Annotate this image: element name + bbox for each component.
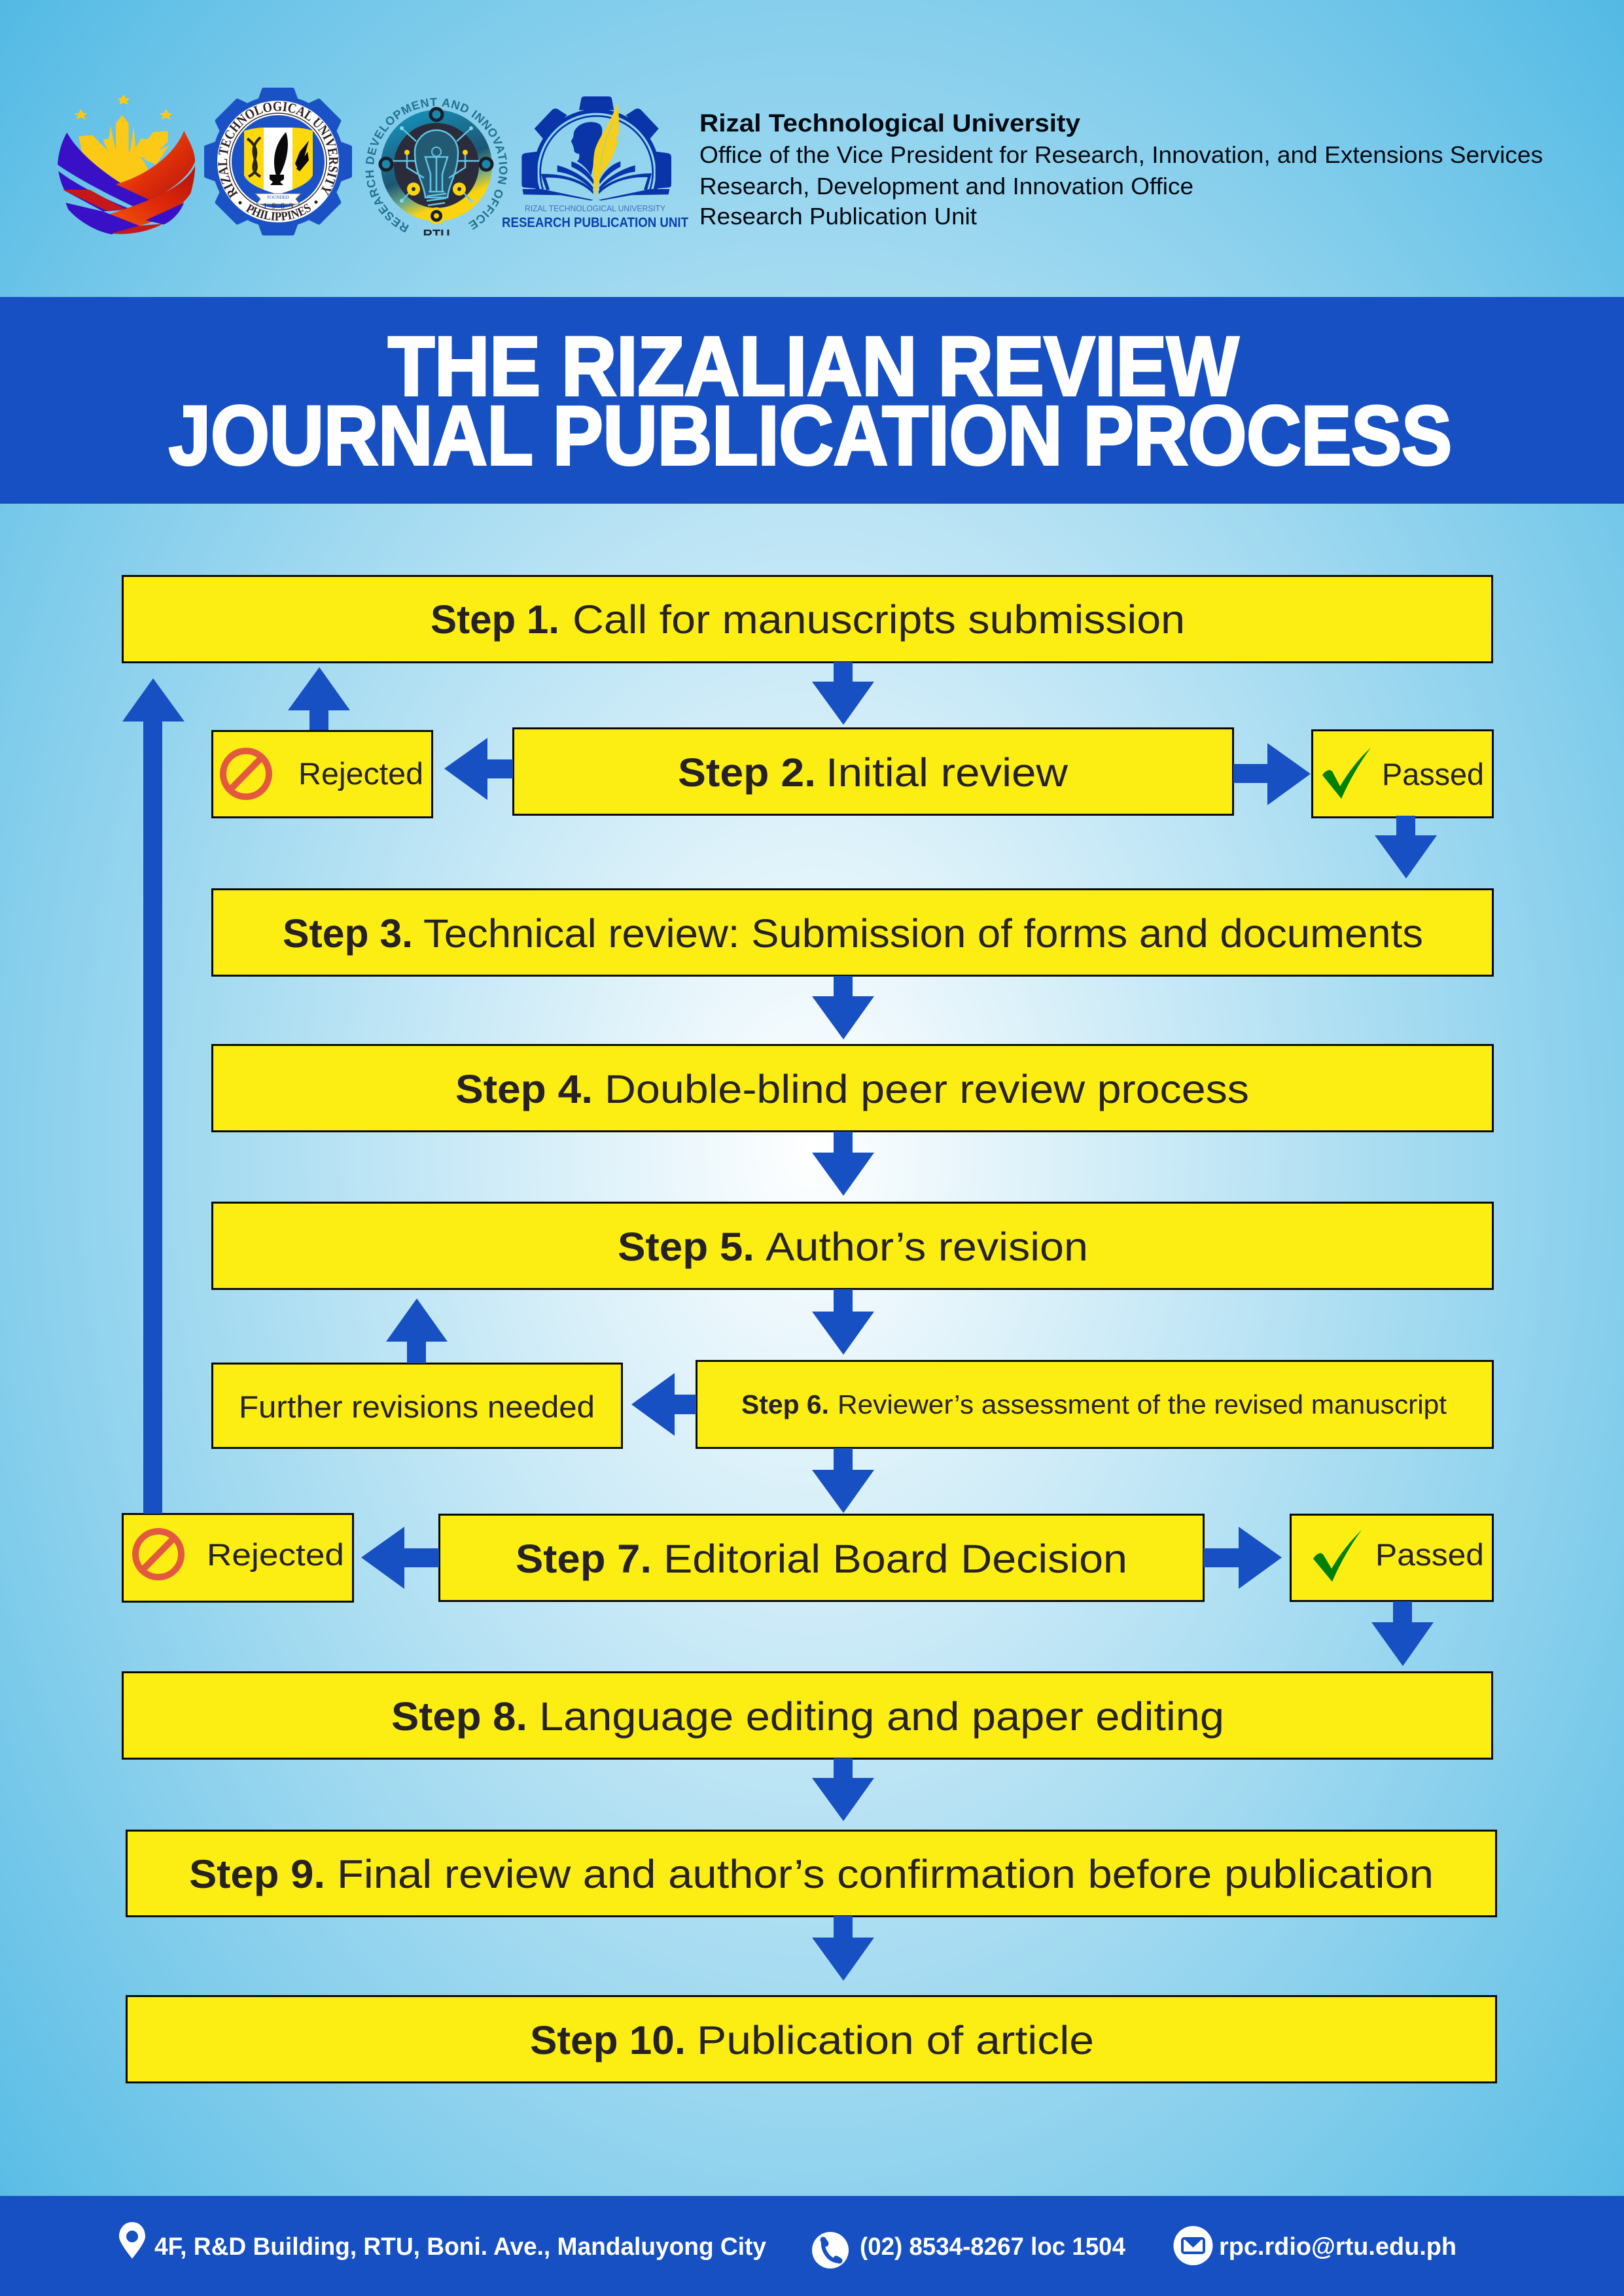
step 3 box: Technical review: Submission of forms and documents — [423, 911, 1423, 956]
step 4 box: Double-blind peer review process — [605, 1067, 1249, 1111]
step 9 box: Step 9. — [189, 1852, 325, 1896]
step 8 box: Language editing and paper editing — [539, 1694, 1224, 1739]
arrow: step 4 to step 5 — [812, 1132, 874, 1196]
arrow: step 7 to passed — [1203, 1527, 1282, 1589]
step 8 box — [123, 1672, 1492, 1758]
icon: location pin — [119, 2222, 145, 2259]
step 6 box — [696, 1361, 1493, 1448]
step 10 box: Step 10. — [530, 2018, 686, 2062]
arrow: passed to step 8 — [1371, 1601, 1434, 1666]
step 4 box: Step 4. — [455, 1067, 593, 1111]
step 7 box: Step 7. — [516, 1537, 652, 1581]
arrow: step 2 to rejected — [444, 738, 513, 800]
rejected box after step 2: Rejected — [298, 756, 423, 791]
phone text: (02) 8534-8267 loc 1504 — [860, 2233, 1125, 2261]
logo: Philippine sun ribbon emblem — [58, 94, 195, 234]
passed box after step 7 — [1290, 1515, 1493, 1601]
step 2 box: Initial review — [826, 750, 1068, 795]
arrow: step 6 to step 7 — [812, 1448, 874, 1513]
arrow: further revisions to step 5 — [386, 1298, 448, 1363]
panel: header — [58, 88, 1543, 235]
title text: JOURNAL PUBLICATION PROCESS — [169, 389, 1452, 483]
logo: Rizal Technological University seal: FOUNDED — [267, 195, 289, 200]
step 1 box: Step 1. — [431, 597, 559, 642]
step 5 box: Step 5. — [618, 1225, 754, 1269]
arrow: rejected at step 7 back to step 1 — [122, 678, 185, 1514]
logo caption: unit: RESEARCH PUBLICATION UNIT — [502, 215, 688, 230]
arrow: step 5 to step 6 — [812, 1289, 874, 1355]
title text: THE RIZALIAN REVIEW — [388, 320, 1239, 413]
step 6 box: Step 6. — [741, 1389, 829, 1419]
step 4 box — [212, 1045, 1493, 1132]
step 9 box: Final review and author’s confirmation before publication — [337, 1852, 1434, 1896]
icon: green check — [1322, 748, 1371, 799]
flowchart — [122, 576, 1496, 2083]
header text block: Research, Development and Innovation Office — [699, 173, 1193, 200]
step 5 box: Author’s revision — [766, 1225, 1088, 1269]
logo: Research Publication Unit — [502, 96, 688, 234]
header text block: Rizal Technological University — [699, 110, 1080, 137]
email text: rpc.rdio@rtu.edu.ph — [1219, 2233, 1456, 2261]
passed box after step 7: Passed — [1375, 1537, 1484, 1572]
arrow: step 2 to passed — [1233, 743, 1311, 805]
icon: phone — [812, 2232, 849, 2269]
step 5 box — [212, 1202, 1493, 1289]
arrow: step 7 to rejected — [361, 1527, 439, 1589]
further revisions box: Further revisions needed — [239, 1389, 595, 1424]
title banner — [0, 297, 1624, 504]
logo: Research Development and Innovation Office: RTU — [423, 228, 450, 242]
icon: prohibited sign — [135, 1531, 181, 1577]
logo caption: university: RIZAL TECHNOLOGICAL UNIVERSITY — [525, 203, 665, 213]
step 2 box — [513, 729, 1233, 815]
footer bar — [0, 2196, 1624, 2296]
logo: Rizal Technological University seal — [204, 88, 352, 235]
step 3 box: Step 3. — [283, 911, 413, 956]
step 2 box: Step 2. — [678, 750, 816, 795]
logo: Rizal Technological University seal: RIZAL TECHNOLOGICAL UNIVERSITY — [218, 102, 338, 199]
step 7 box: Editorial Board Decision — [663, 1537, 1127, 1581]
arrow: step 3 to step 4 — [812, 976, 874, 1039]
header text block: Office of the Vice President for Research, Innovation, and Extensions Services — [699, 141, 1543, 168]
arrow: rejected back to step 1 — [288, 667, 350, 730]
rejected box after step 7 — [123, 1514, 353, 1601]
header text block: Research Publication Unit — [699, 203, 977, 230]
arrow: step 6 to further revisions — [631, 1373, 696, 1436]
passed box after step 2: Passed — [1382, 757, 1484, 791]
step 7 box — [440, 1515, 1204, 1601]
step 3 box — [212, 890, 1493, 976]
step 6 box: Reviewer’s assessment of the revised manuscript — [838, 1389, 1447, 1419]
further revisions box — [212, 1363, 622, 1448]
arrow: step 8 to step 9 — [812, 1758, 874, 1821]
logo: Rizal Technological University seal: 1 9 6 9 — [263, 201, 293, 211]
step 9 box — [127, 1830, 1496, 1917]
arrow: step 1 to step 2 — [812, 662, 874, 725]
icon: prohibited sign — [223, 751, 269, 797]
arrow: passed to step 3 — [1375, 816, 1437, 878]
icon: email — [1174, 2226, 1213, 2265]
title text — [169, 320, 1452, 483]
step 10 box: Publication of article — [697, 2018, 1094, 2062]
header text block — [699, 110, 1543, 230]
rejected box after step 2 — [212, 731, 432, 818]
step 10 box — [127, 1996, 1496, 2083]
icon: green check — [1313, 1530, 1362, 1582]
passed box after step 2 — [1313, 730, 1493, 818]
logo: Rizal Technological University seal: PHILIPPINES — [245, 203, 311, 221]
step 1 box: Call for manuscripts submission — [573, 597, 1185, 642]
address text: 4F, R&D Building, RTU, Boni. Ave., Mandaluyong City — [154, 2233, 766, 2261]
step 8 box: Step 8. — [391, 1694, 527, 1739]
step 1 box — [123, 576, 1492, 662]
logo: Research Development and Innovation Office: RESEARCH DEVELOPMENT AND INNOVATION OFFICE — [365, 98, 508, 233]
rejected box after step 7: Rejected — [207, 1537, 344, 1572]
arrow: step 9 to step 10 — [812, 1916, 874, 1981]
